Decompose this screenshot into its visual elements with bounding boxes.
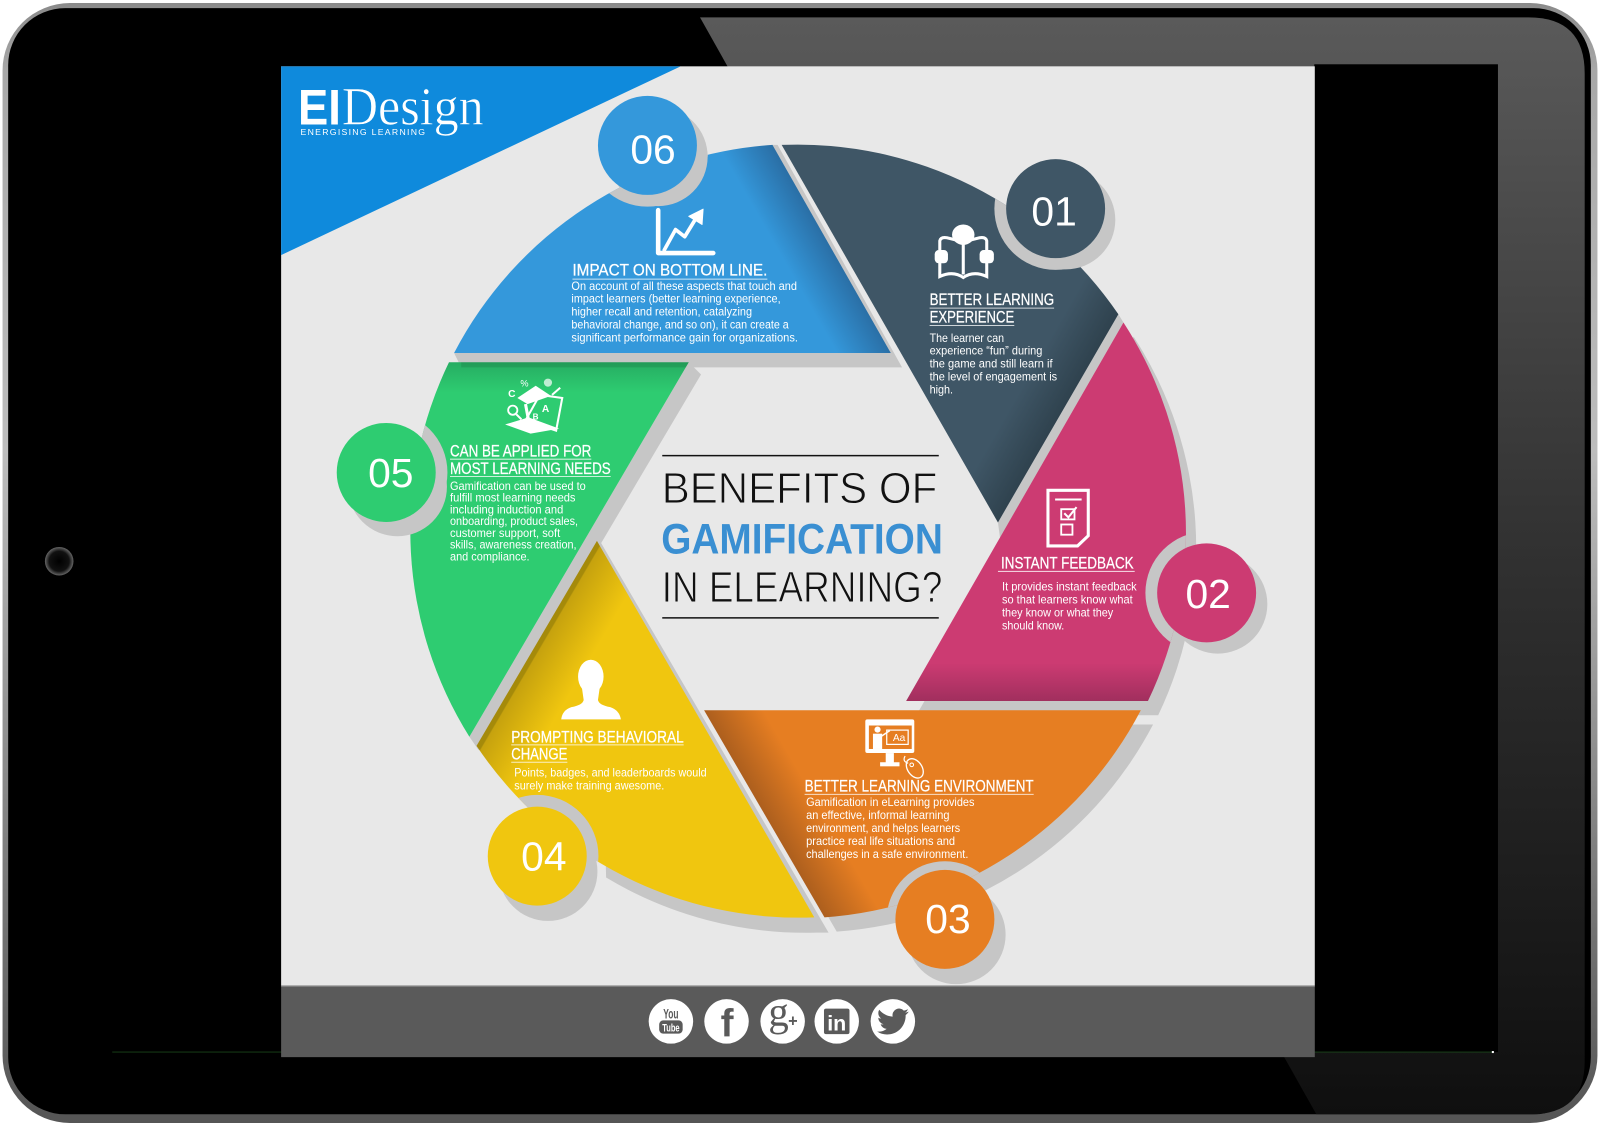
body text: an effective, informal learning (806, 808, 950, 822)
icon: monitor with presenter: Aa (893, 733, 906, 744)
logo: EIDesign: Design (342, 76, 484, 136)
badge 03: 03 (925, 896, 971, 942)
heading: BETTER LEARNING ENVIRONMENT (805, 777, 1034, 795)
heading: BETTER LEARNING (930, 291, 1054, 309)
segment 03: orange (704, 710, 1141, 917)
body text: high. (930, 382, 953, 396)
segment shadows (454, 145, 1196, 933)
body text: surely make training awesome. (514, 779, 664, 793)
icon: monitor with presenter (865, 719, 927, 781)
body text: challenges in a safe environment. (806, 847, 968, 861)
body text: behavioral change, and so on), it can create a (571, 317, 789, 331)
heading: INSTANT FEEDBACK (1001, 554, 1134, 572)
title: GAMIFICATION (661, 516, 943, 564)
body text (1002, 580, 1138, 632)
icon: laptop with graduation cap (505, 379, 562, 434)
badge 05: 05 (368, 450, 414, 496)
body text: Gamification can be used to (450, 479, 586, 493)
heading: CHANGE (511, 746, 567, 764)
panel: 01 better learning experience (930, 224, 1057, 396)
panel: 04 prompting behavioral change (511, 660, 707, 793)
icon: YouTube: Tube (662, 1023, 680, 1035)
icon: Google Plus: g (768, 990, 789, 1035)
body text: impact learners (better learning experience, (571, 292, 781, 306)
body text: so that learners know what (1002, 592, 1133, 606)
body text: experience “fun” during (930, 344, 1043, 358)
black screen strip (1314, 64, 1498, 1052)
body text: onboarding, product sales, (450, 514, 578, 528)
badge 01: 01 (1031, 189, 1077, 235)
body text: Gamification in eLearning provides (806, 795, 974, 809)
icon: LinkedIn (814, 999, 859, 1044)
icon: LinkedIn: in (827, 1012, 846, 1036)
heading: MOST LEARNING NEEDS (450, 460, 611, 478)
icon: Facebook: f (721, 1003, 734, 1046)
icon: YouTube (649, 999, 693, 1044)
badge 03 (895, 870, 1006, 984)
body text: they know or what they (1002, 605, 1114, 619)
body text: the level of engagement is (930, 370, 1057, 384)
body text: environment, and helps learners (806, 821, 960, 835)
heading: CAN BE APPLIED FOR (450, 443, 591, 461)
icon: laptop with graduation cap: % (520, 379, 529, 389)
heading (450, 443, 611, 478)
circle rings (325, 84, 1268, 978)
panel: 06 impact on bottom line (571, 209, 798, 344)
title: IN ELEARNING? (662, 563, 942, 612)
footer bar (281, 986, 1315, 1057)
social icons (649, 990, 915, 1046)
body text: including induction and (450, 502, 563, 516)
badge 04: 04 (521, 833, 567, 879)
body text: significant performance gain for organizations. (571, 330, 798, 344)
panel: 03 better learning environment (805, 719, 1034, 861)
blue corner banner (281, 66, 681, 255)
body text: and compliance. (450, 549, 530, 563)
icon: checklist document (1048, 490, 1088, 546)
segment 06: blue (454, 145, 891, 353)
body text: the game and still learn if (930, 357, 1053, 371)
body text (930, 331, 1057, 396)
screen reflection (700, 17, 1585, 1114)
panel: 05 can be applied for most learning needs (450, 379, 611, 563)
badge 04 (488, 807, 597, 921)
heading: EXPERIENCE (930, 308, 1014, 326)
body text: Points, badges, and leaderboards would (514, 766, 707, 780)
screen bottom lines (112, 1051, 1494, 1053)
body text (514, 766, 707, 793)
heading (511, 728, 684, 764)
badge 06 (598, 96, 708, 206)
icon: Google Plus: + (788, 1013, 798, 1031)
badge 02: 02 (1185, 571, 1231, 617)
body text: It provides instant feedback (1002, 580, 1138, 594)
body text: The learner can (930, 331, 1004, 345)
body text: fulfill most learning needs (450, 491, 576, 505)
body text: On account of all these aspects that touch and (571, 279, 797, 293)
badge 05 (337, 423, 447, 536)
body text: customer support, soft (450, 526, 561, 540)
icon: rising chart (658, 209, 713, 253)
body text: should know. (1002, 618, 1064, 632)
title (661, 456, 943, 618)
icon: Facebook (704, 999, 749, 1046)
segment 05: green (410, 362, 689, 737)
body text (806, 795, 974, 861)
heading (930, 291, 1054, 326)
icon: reader with book (935, 224, 994, 278)
icon: person silhouette (561, 660, 621, 719)
body text: skills, awareness creation, (450, 538, 577, 552)
icon: laptop with graduation cap: B (533, 412, 539, 421)
title: BENEFITS OF (662, 464, 937, 513)
heading: PROMPTING BEHAVIORAL (511, 728, 684, 746)
body text: practice real life situations and (806, 834, 955, 848)
heading: IMPACT ON BOTTOM LINE. (572, 262, 767, 280)
segment 04: yellow (477, 541, 814, 918)
icon: YouTube: You (663, 1006, 679, 1022)
segment 02: pink (906, 322, 1186, 701)
segment 01: dark slate (782, 145, 1118, 522)
logo: EIDesign: ENERGISING LEARNING (301, 127, 425, 137)
page background (281, 66, 1315, 986)
badge 02 (1157, 543, 1267, 654)
body text (450, 479, 586, 563)
panel: 02 instant feedback (998, 490, 1138, 632)
icon: laptop with graduation cap: C (508, 389, 516, 400)
icon: laptop with graduation cap: A (542, 404, 550, 415)
camera (45, 547, 73, 576)
icon: Google Plus (760, 990, 805, 1044)
body text: higher recall and retention, catalyzing (571, 305, 752, 319)
body text (571, 279, 798, 344)
icon: Twitter (871, 999, 915, 1044)
badge 01 (1006, 159, 1115, 269)
logo: EIDesign: EI (298, 79, 341, 135)
badge 06: 06 (630, 126, 676, 172)
